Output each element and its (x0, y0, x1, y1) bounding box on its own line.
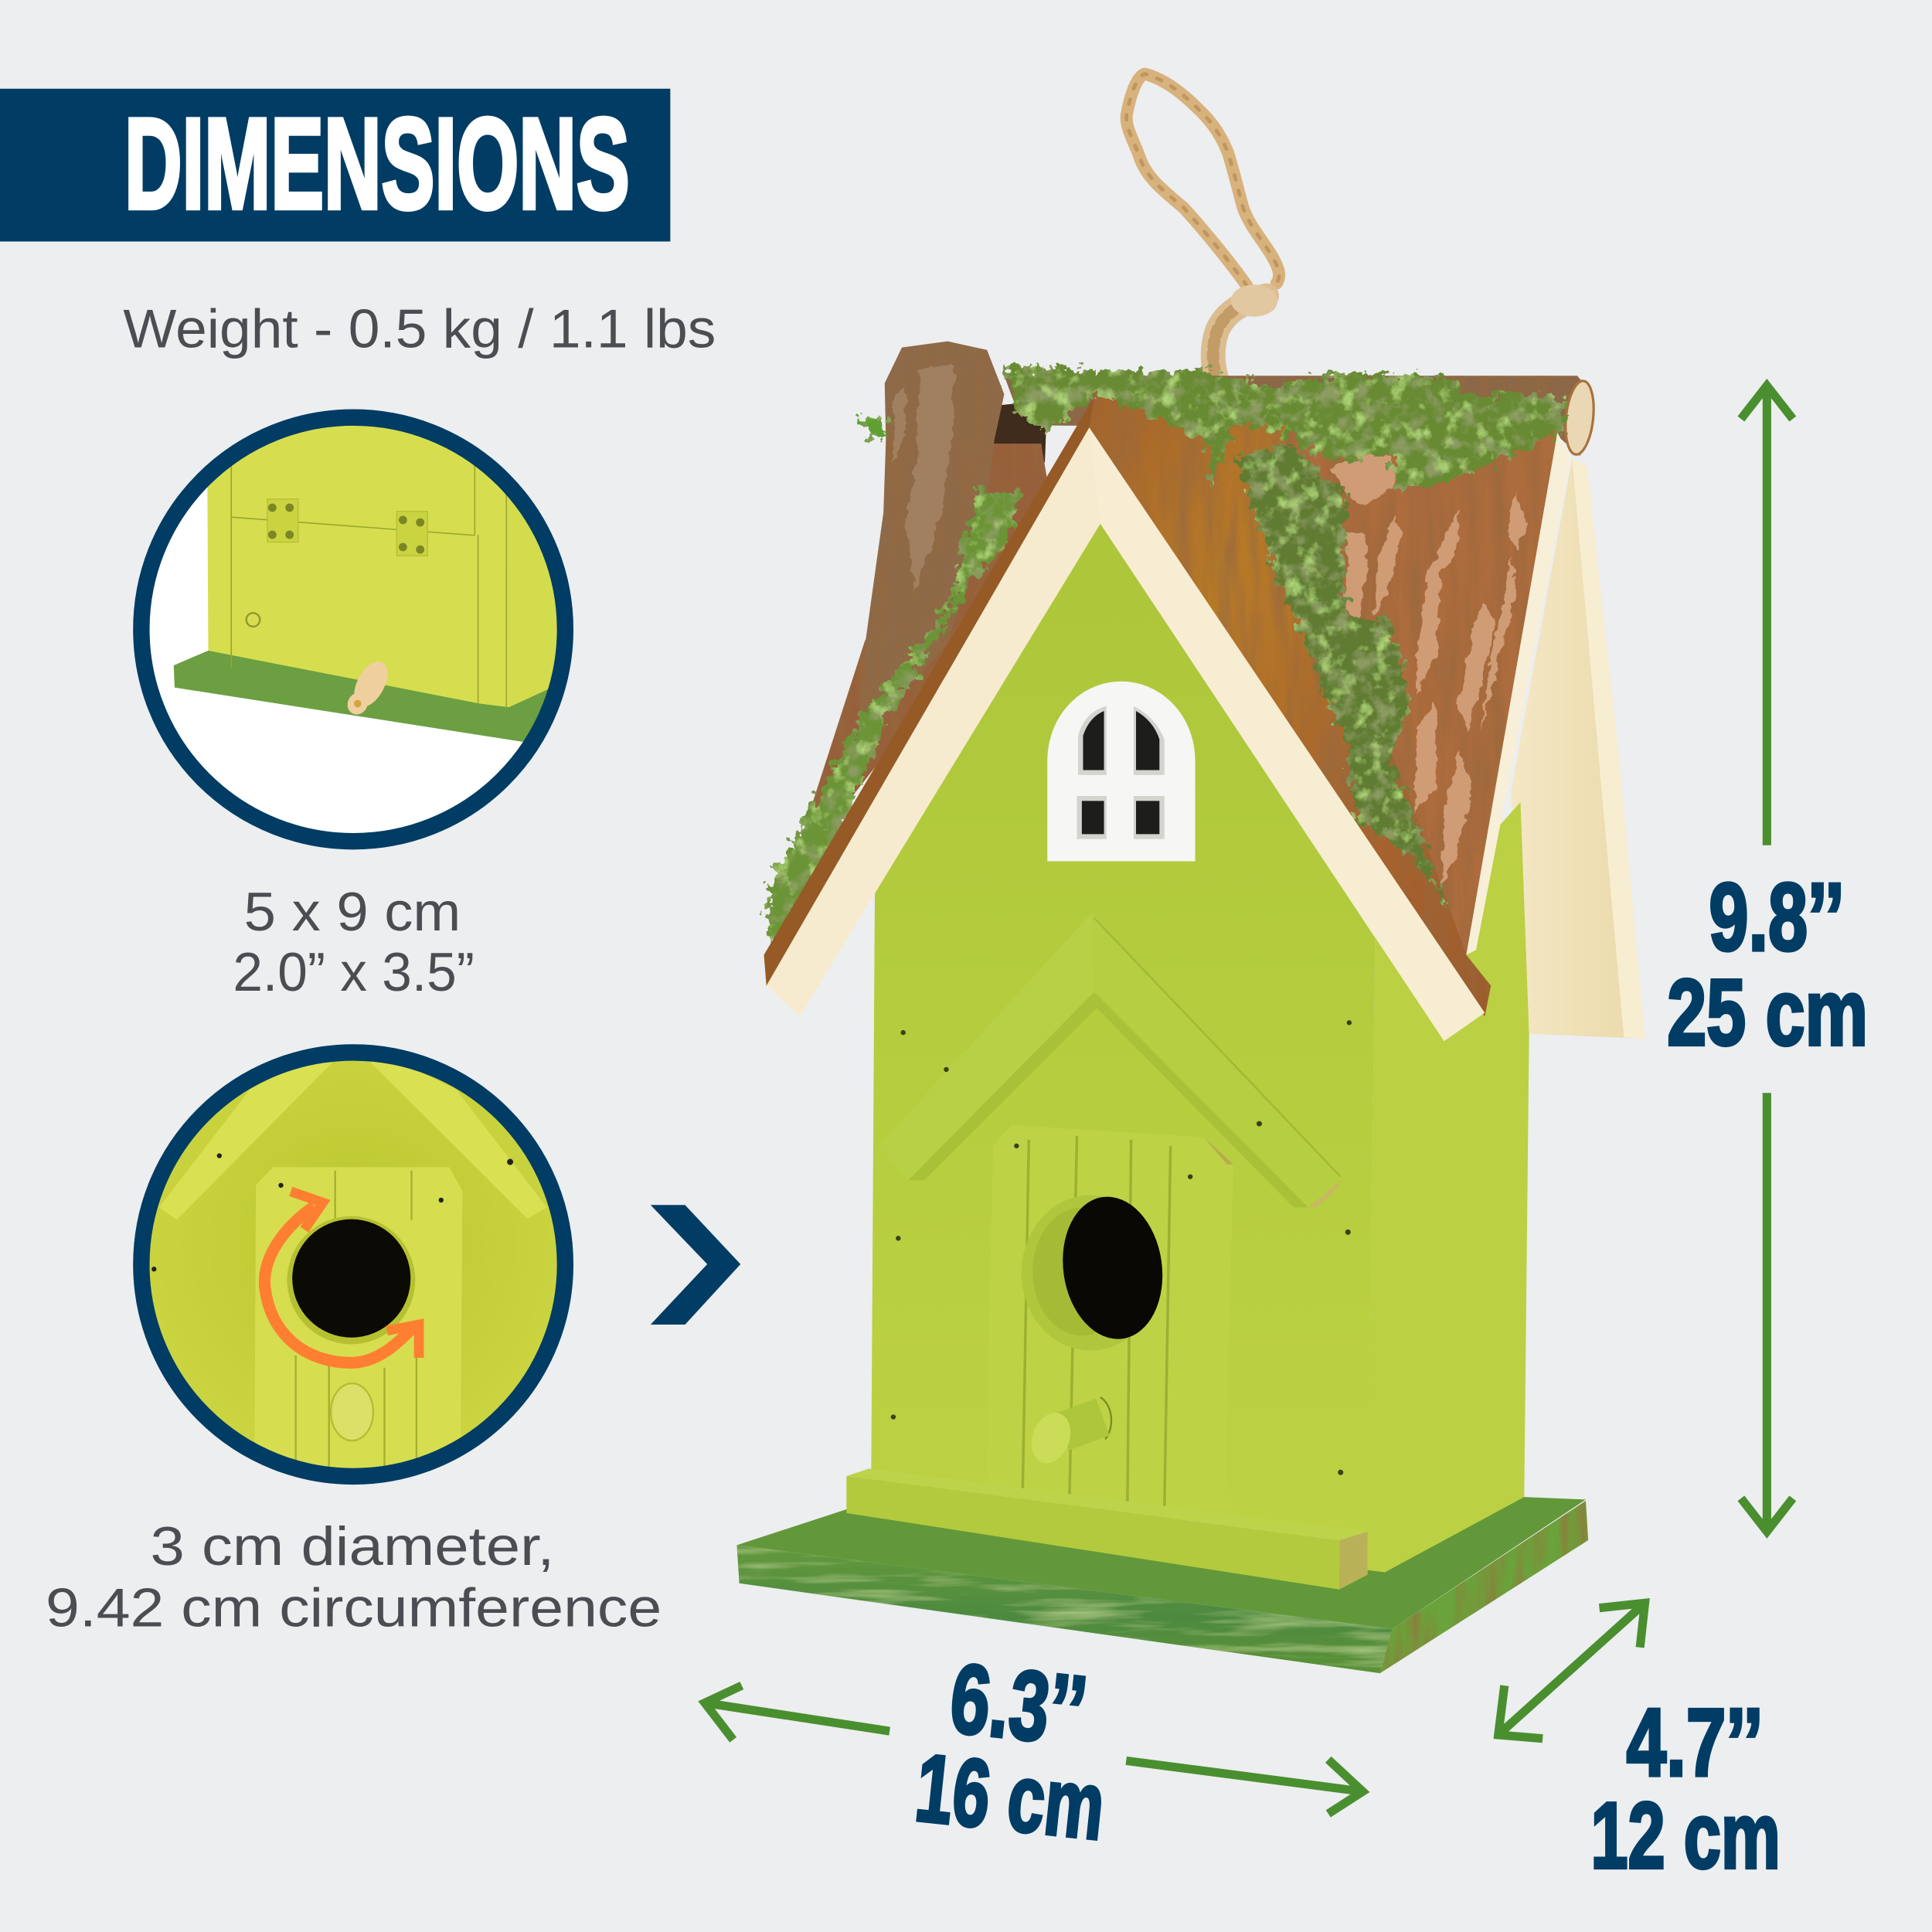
depth value (1590, 1689, 1781, 1888)
caption: hatch size: 2.0” x 3.5” (233, 941, 474, 1002)
log (856, 342, 1004, 752)
roof surface (1089, 396, 1559, 1016)
caption: hole size: 3 cm diameter, (151, 1515, 554, 1577)
log end cut (1563, 379, 1597, 456)
icon: orange circumference arrow (264, 1192, 419, 1362)
left white gable board (767, 427, 1100, 1016)
left brown edge (764, 396, 1094, 986)
weight text: Weight - 0.5 kg / 1.1 lbs (123, 298, 716, 359)
moss on roof (1001, 365, 1567, 910)
back cream roof panel (1511, 458, 1645, 1039)
log light bark patches (893, 363, 955, 591)
left moss (767, 417, 1026, 949)
height value: 9.8’’ (1709, 863, 1845, 971)
caption: hatch size (233, 881, 474, 1002)
right white trim (1466, 433, 1571, 955)
nail holes (891, 1020, 1352, 1475)
outer cream trim (1572, 458, 1645, 1039)
birdhouse photo illustration (736, 74, 1645, 1673)
door panel (986, 1125, 1233, 1513)
caption: hole size: 9.42 cm circumference (46, 1577, 662, 1638)
width value: 6.3’’ (945, 1644, 1091, 1767)
caption: hole size (46, 1515, 662, 1638)
height value (1667, 863, 1868, 1065)
front wall (871, 524, 1375, 1540)
hanging rope (1127, 74, 1279, 377)
caption: hatch size: 5 x 9 cm (244, 881, 461, 942)
icon: navy chevron arrow (651, 1205, 740, 1325)
perch (1025, 1397, 1111, 1468)
bark light patches (1332, 451, 1528, 887)
right white gable board (1089, 427, 1485, 1041)
depth value: 12 cm (1590, 1783, 1781, 1888)
height arrow (1741, 386, 1793, 1532)
depth arrow (1498, 1603, 1645, 1739)
title banner (0, 89, 670, 241)
title banner: DIMENSIONS (124, 91, 630, 236)
bark area (1281, 431, 1559, 955)
panel: hatch detail circle (141, 406, 565, 842)
width arrow (705, 1685, 1362, 1814)
base board (736, 1497, 1588, 1673)
width value: 16 cm (911, 1734, 1110, 1860)
depth value: 4.7’’ (1627, 1689, 1764, 1797)
panel: entrance hole detail circle (141, 1047, 565, 1478)
back ridge log (1004, 376, 1591, 456)
left roof bark panel (801, 444, 1047, 862)
lower gable trim (879, 913, 1341, 1207)
height value: 25 cm (1667, 960, 1868, 1065)
lower frame bar (736, 1469, 1588, 1673)
window (1047, 682, 1196, 861)
side wall (1368, 802, 1529, 1580)
width value (911, 1644, 1110, 1860)
cavity behind log (986, 400, 1047, 518)
